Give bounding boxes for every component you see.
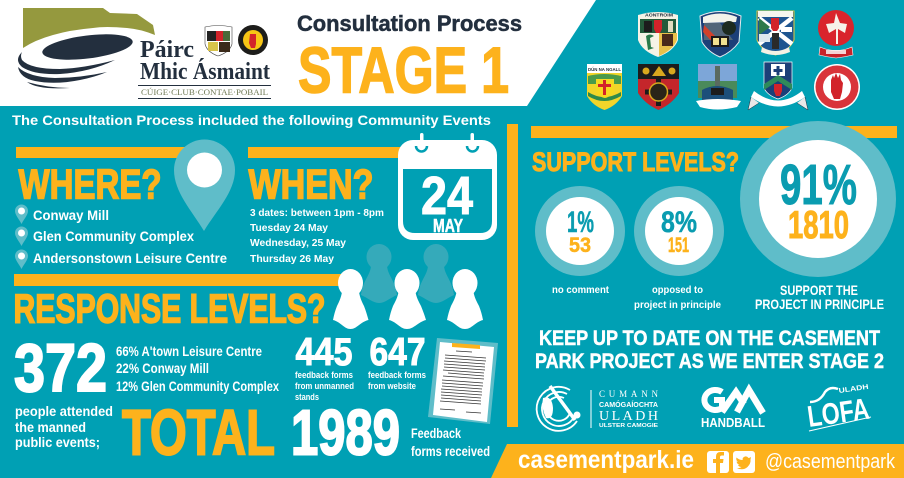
crest: Fermanagh	[696, 64, 741, 110]
stat: 647 forms: feedback forms	[368, 370, 426, 380]
icon: feedback form	[428, 338, 498, 424]
chart: no comment	[535, 186, 625, 296]
stat: total: forms received	[411, 443, 490, 459]
chart: no comment: 1%	[567, 206, 594, 239]
dates text	[250, 207, 384, 265]
logo: Páirc Mhic Ásmaint: Mhic Ásmaint	[140, 59, 270, 85]
panel: when	[248, 133, 497, 265]
intro line: The Consultation Process included the following Community Events	[12, 112, 491, 128]
stat: 647 forms: 647	[370, 331, 426, 374]
logo: Páirc Mhic Ásmaint: CÚIGE·CLUB·CONTAE·POBAIL	[141, 87, 268, 97]
dates text: Tuesday 24 May	[250, 222, 328, 234]
crest: Donegal	[587, 64, 622, 110]
crest: Armagh	[700, 12, 741, 57]
location list	[15, 205, 227, 269]
icon: calendar: MAY	[433, 216, 463, 236]
logo: Páirc Mhic Ásmaint	[18, 8, 271, 99]
county crests	[587, 10, 860, 110]
stat: 372 attended: people attended	[15, 403, 113, 419]
footer bar	[491, 444, 904, 478]
icon: twitter	[733, 451, 755, 473]
chart: no comment: 53	[569, 234, 591, 257]
chart: opposed: 151	[668, 234, 689, 257]
crest: Monaghan	[748, 62, 808, 110]
stat: 372 attended: 12% Glen Community Complex	[116, 379, 279, 394]
stat: 372 attended: the manned	[15, 419, 86, 435]
heading: response levels: RESPONSE LEVELS?	[14, 286, 326, 332]
stat: 372 attended: public events;	[15, 434, 100, 450]
header white panel	[0, 0, 596, 106]
crest: Ulster small	[238, 25, 268, 55]
dates text: 3 dates: between 1pm - 8pm	[250, 207, 384, 219]
logo: Ulster Camogie: ULADH	[599, 409, 658, 424]
call to action	[535, 327, 884, 373]
stat: 445 forms: from unmanned	[295, 381, 354, 391]
logo: Ulster Camogie	[537, 386, 658, 431]
website: casementpark.ie	[518, 446, 694, 474]
stat: 445 forms	[295, 331, 354, 402]
icon: calendar	[398, 133, 497, 240]
chart: opposed	[634, 186, 724, 311]
stat: 372 attended	[14, 330, 279, 450]
crest: Donegal: DÚN NA NGALL	[588, 66, 621, 72]
chart: opposed: 8%	[661, 206, 697, 239]
dates text: Wednesday, 25 May	[250, 237, 346, 249]
crest: Cavan	[757, 11, 794, 55]
dates text: Thursday 26 May	[250, 253, 334, 265]
panel: support levels	[531, 121, 897, 312]
stat: 445 forms: stands	[295, 392, 319, 402]
logo: Uladh LOFA: LOFA	[805, 393, 871, 434]
chart: support: 1810	[788, 204, 849, 247]
chart: opposed: opposed to	[652, 285, 703, 296]
heading: Consultation Process: Consultation Process	[297, 11, 522, 36]
panel: where	[15, 140, 235, 269]
stat: 372 attended: 372	[14, 330, 107, 406]
chart: support: 91%	[780, 153, 857, 217]
location list: Conway Mill	[33, 207, 109, 223]
logo: Ulster Camogie: ULSTER CAMOGIE	[599, 423, 658, 429]
stat: total: TOTAL	[122, 396, 275, 468]
icon: facebook	[707, 451, 729, 473]
logo: Páirc Mhic Ásmaint: Páirc	[140, 37, 194, 63]
heading: when: WHEN?	[248, 160, 374, 208]
stat: 372 attended: 66% A'town Leisure Centre	[116, 344, 262, 359]
location list: Glen Community Complex	[33, 228, 194, 244]
stat: total	[122, 396, 490, 468]
heading: support levels: SUPPORT LEVELS?	[532, 147, 739, 177]
logo: Ulster Camogie: CAMÓGAÍOCHTA	[599, 400, 658, 409]
stat: 445 forms: 445	[296, 331, 352, 374]
crest: Antrim: AONTROIM	[645, 12, 673, 18]
crest: Antrim small	[205, 26, 232, 56]
stat: 647 forms	[368, 331, 426, 391]
stat: 647 forms: from website	[368, 381, 416, 391]
crest: Derry	[818, 10, 854, 58]
stat: 372 attended: 22% Conway Mill	[116, 361, 209, 376]
logo: Uladh LOFA: ULADH	[838, 384, 869, 395]
chart: support: SUPPORT THE	[780, 282, 858, 298]
heading: where: WHERE?	[18, 160, 162, 208]
logo: Ulster Camogie: CUMANN	[599, 389, 658, 399]
stat: total: 1989	[291, 396, 400, 468]
chart: opposed: project in principle	[634, 300, 721, 311]
icon: large map pin	[174, 140, 235, 231]
panel: response levels	[14, 244, 498, 468]
crest: Antrim	[638, 12, 678, 57]
chart: no comment: no comment	[552, 285, 610, 296]
stat: 445 forms: feedback forms	[295, 370, 353, 380]
icon: calendar: 24	[421, 166, 473, 226]
crest: Down	[638, 64, 679, 110]
heading: STAGE 1: STAGE 1	[298, 34, 509, 106]
logo: GAA Handball: HANDBALL	[701, 416, 765, 430]
logo: GAA Handball	[701, 390, 765, 430]
crest: Tyrone	[814, 64, 860, 110]
stat: total: Feedback	[411, 425, 461, 441]
divider bar	[507, 124, 518, 427]
icon: people group	[333, 244, 483, 329]
location list: Andersonstown Leisure Centre	[33, 250, 227, 266]
chart: support	[740, 121, 896, 312]
